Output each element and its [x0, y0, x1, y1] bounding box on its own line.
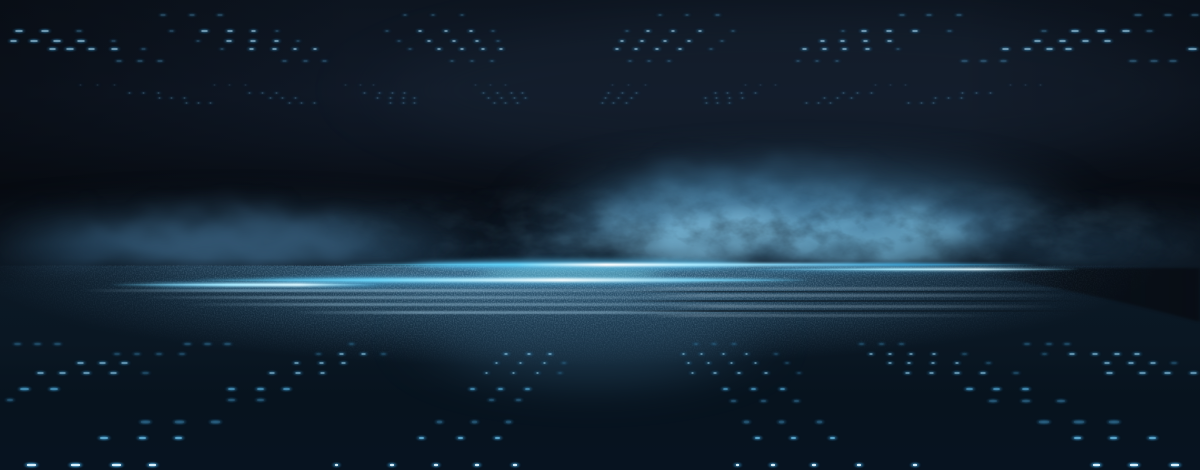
ceiling light grid: [11, 15, 1198, 103]
floor surface: [0, 258, 1200, 470]
fog: left bank: [0, 222, 480, 266]
floor light grid: [8, 344, 1196, 465]
ceiling dots: far rows: [80, 85, 1041, 103]
streak: right: [740, 268, 1080, 270]
floor dots: dim rows: [8, 344, 1176, 422]
ceiling dots: dim rows: [77, 15, 1198, 61]
neon streaks: [110, 263, 1080, 286]
horizon glow: [150, 260, 1020, 288]
ceiling dots: bright rows: [11, 31, 1196, 49]
floor: right-side shadow: [960, 268, 1200, 322]
streak: middle: [190, 278, 810, 282]
fog: wide soft haze: [0, 166, 1200, 268]
fog texture: [448, 193, 1150, 262]
floor grain: [35, 265, 1100, 355]
floor dots: nearest bright row: [28, 464, 1178, 466]
wet floor reflection bands: [80, 287, 1100, 317]
fog: right bank: [505, 174, 1130, 263]
fog: main smoke bank: [0, 174, 1130, 266]
floor dots: mid rows: [21, 354, 1196, 438]
streak: upper main: [340, 263, 1040, 266]
streak: lower left: [110, 283, 380, 286]
